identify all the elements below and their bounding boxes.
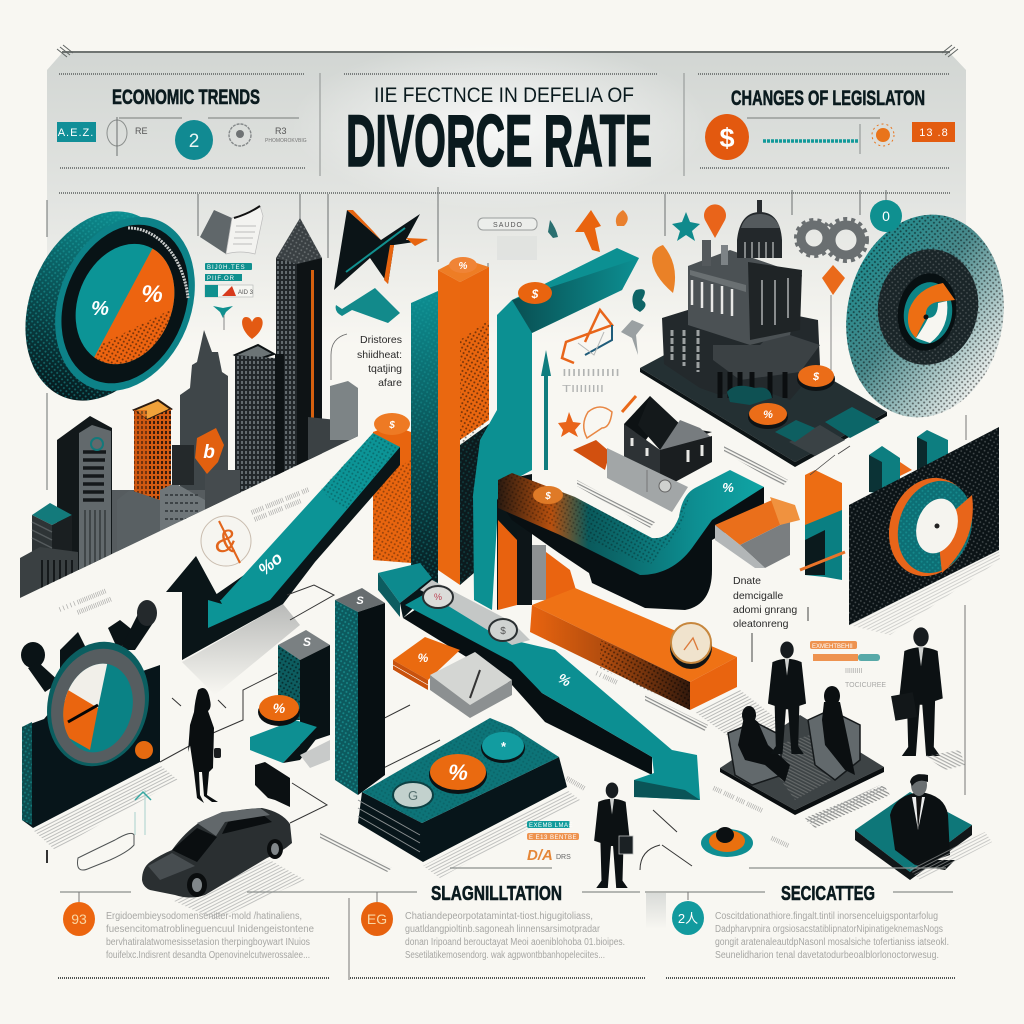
teal arch arrow [473, 248, 639, 610]
heading: slagnilltation: SLAGNILLTATION [431, 883, 562, 905]
seated man on teal stack [855, 774, 972, 880]
orange column behind arrow [373, 413, 411, 563]
porch [713, 330, 820, 380]
platform with coins [358, 718, 567, 862]
standing man right with briefcase [891, 627, 965, 770]
tower: mid [235, 345, 284, 514]
hatched notes at bottom right: IIIIIIIIII [769, 835, 790, 850]
orange bill stack and box: % [418, 651, 429, 665]
badge: EG [367, 911, 387, 927]
bottom labels [527, 776, 586, 864]
lower floor [662, 300, 820, 400]
platform with coins: * [500, 739, 506, 754]
descending arrow: % [434, 592, 442, 602]
annotation: dristores [331, 334, 402, 389]
coins on capitol: $ [812, 371, 820, 383]
tall teal column: S [356, 595, 364, 607]
hatched notes at bottom right: I I IIIIIIII [594, 670, 618, 687]
gauge hatch shadow [33, 765, 178, 850]
notched key icon [46, 790, 151, 870]
text: donan Iripoand berouctayat Meoi aoeniblohoba 01.bioipes. [405, 937, 625, 948]
orange tan block [715, 497, 800, 568]
faint diagonal captions: IIIIIIIIIIIIIIIIIII [76, 597, 113, 617]
heart icon [242, 317, 263, 339]
dome [737, 200, 782, 258]
rising arrow: %o [255, 548, 286, 579]
chimneys [702, 240, 711, 266]
hatched notes at bottom right: IIIII IIIIII IIIII IIIIIIIII [711, 785, 764, 815]
main curved band: $ [544, 491, 551, 502]
orange bill stack and box [393, 637, 512, 718]
shield icon: b [203, 442, 215, 463]
main curved band [498, 470, 764, 610]
shrub [727, 386, 772, 405]
upper floor [688, 250, 802, 345]
header panel [47, 40, 966, 490]
economic trends icons: PHOMOROKVBIG [265, 138, 307, 144]
leader lines [160, 585, 692, 870]
house [622, 396, 712, 482]
economic trends icons: 2 [189, 131, 199, 152]
descending arrow: $ [500, 626, 506, 637]
text: Chatiandepeorpotatamintat-tiost.higugitoliass, [405, 911, 593, 922]
bottom labels: D/A [527, 847, 553, 864]
bottom labels: E E13 BENTBE [529, 835, 577, 841]
small labels [205, 263, 254, 330]
gauge panel [21, 600, 163, 828]
people labels [810, 641, 886, 689]
rising arrow [166, 433, 400, 660]
badge [361, 892, 393, 936]
title: IIE FECTNCE IN DEFELIA OF [374, 84, 634, 107]
capitol building [640, 200, 887, 467]
dial [33, 630, 163, 778]
column 3 [646, 892, 949, 961]
top right icons [548, 200, 902, 438]
small bars right [800, 430, 948, 580]
platform [640, 320, 887, 467]
text: Seunelidharion tenal davetatodurbeoalblorlonoctorwesug. [715, 950, 939, 961]
faint diagonal captions: IIIIIII IIIIIIII IIIIIIIII [253, 498, 303, 524]
envelope outline icon: TIIIIIIII [562, 384, 604, 395]
legislation icons: $ [719, 123, 735, 153]
top right icons: 0 [882, 208, 890, 224]
text: Dadpharvpnira orgsiosacstatiblipnatorNipinatigeknemasNogs [715, 924, 943, 935]
badge top centre: SAUDO [493, 222, 523, 229]
column divider [348, 898, 350, 980]
text: Coscitdationathiore.fingalt.tintil inorsenceluigspontarfolug [715, 911, 938, 922]
bottom labels: IIIIIIIIIII [564, 776, 586, 792]
envelope outline icon [562, 310, 620, 395]
round badge icon [201, 516, 251, 566]
building: right small [330, 381, 358, 440]
teal base with coin column: S [303, 635, 311, 649]
building: rear block [308, 417, 358, 460]
bottom dotted rules [58, 977, 955, 979]
platform with coins: % [448, 760, 468, 785]
text [405, 911, 625, 961]
people labels: IIIIIIIII [845, 668, 863, 675]
arrow shadow [182, 604, 300, 695]
annotation: dristores: afare [378, 377, 402, 389]
building: orange [134, 400, 171, 510]
badge [63, 892, 95, 936]
coins on capitol [748, 365, 835, 429]
legislation icons [705, 114, 955, 160]
people labels: TOCICUREE [845, 682, 886, 689]
teal up arrow [541, 350, 551, 470]
platform with coins: G [408, 788, 418, 803]
badge [646, 892, 704, 935]
faint diagonal captions: IIIIIII IIIIIIIIII IIIIIIII IIII [250, 487, 311, 517]
clock on box [670, 623, 712, 669]
text: guatldangpioltinb.sagoneah linnensarsimotpradar [405, 924, 601, 935]
text [106, 911, 314, 961]
plate icon [701, 827, 753, 857]
title [346, 84, 652, 182]
coins on capitol: % [763, 409, 773, 421]
orange box [530, 588, 785, 745]
man with briefcase, bottom centre [594, 782, 633, 888]
text [715, 911, 949, 961]
tall orange bar [438, 257, 489, 585]
gothic spire building [180, 330, 228, 530]
annotation: demographic: oleatonreng [733, 618, 789, 630]
section rules [60, 868, 953, 892]
badge: 2人 [678, 911, 698, 926]
faint hatch note [320, 832, 392, 872]
teal arch arrow: $ [531, 287, 539, 301]
annotation: dristores: Dristores [360, 334, 402, 346]
faint diagonal captions: I I I I I IIIIIIIIIIIIIIII [58, 588, 108, 614]
city skyline [20, 218, 358, 600]
hatched notes at bottom right [594, 670, 992, 880]
lower block [20, 547, 78, 600]
annotation: demographic [733, 575, 808, 662]
heading: economic trends: ECONOMIC TRENDS [112, 86, 260, 109]
badge: 93 [71, 911, 87, 927]
bottom labels: DRS [556, 854, 571, 861]
teal base with coin column [250, 630, 330, 768]
descending arrow: % [555, 670, 574, 690]
pie disc top left: % [141, 281, 163, 308]
car [142, 808, 305, 920]
knobs [21, 600, 157, 692]
speech bubble [255, 762, 290, 807]
pie disc top left [25, 211, 195, 401]
heading: changes of legislation: CHANGES OF LEGISLATON [731, 87, 925, 110]
column 2 [361, 892, 625, 961]
seated woman left [728, 706, 790, 785]
wall segment [573, 440, 688, 512]
legislation icons: 13 .8 [919, 127, 949, 139]
annotation: demographic: adomi gnrang [733, 604, 797, 616]
annotation: dristores: tqatjing [368, 363, 402, 375]
record disc right [830, 202, 1020, 430]
annotation: dristores: shiidheat: [357, 349, 402, 361]
teal base with coin column: % [273, 700, 286, 716]
envelope outline icon: IIIIIIIIIIII [562, 368, 620, 379]
small labels: AID 3 [238, 290, 254, 296]
small labels: BIJ0H.TES [207, 265, 246, 271]
economic trends icons: A.E.Z. [58, 127, 94, 139]
column 1 [63, 892, 314, 961]
seating platform [720, 715, 890, 828]
title: DIVORCE RATE [346, 101, 652, 182]
building: far fill [112, 490, 240, 560]
main curved band: % [722, 480, 734, 495]
badge top centre [478, 218, 537, 260]
economic trends icons [57, 117, 307, 160]
annotation: demographic: Dnate [733, 575, 761, 587]
plane arrow icon [334, 210, 428, 290]
building: left striped [57, 416, 112, 570]
tall teal bar [411, 291, 438, 590]
tall teal column [335, 588, 385, 795]
standing man centre [768, 641, 806, 754]
mid grey blocks [117, 445, 240, 552]
book icon [200, 206, 263, 254]
text: gongit aratenaleautdpNasonl mosalsiche tofertianiss iatseokl. [715, 937, 949, 948]
pie disc top left: % [91, 298, 109, 320]
faint diagonal captions [58, 487, 311, 617]
text: bervhatiralatwomesissetasion therpingboywart INuios [106, 937, 310, 948]
economic trends icons: RE [135, 126, 148, 136]
annotation: demographic: demcigalle [733, 590, 783, 602]
shield icon [195, 428, 224, 474]
people labels: EXMEHTBEHII [812, 644, 853, 650]
tower: tall [276, 218, 322, 480]
right vertical rule [964, 605, 966, 795]
heading: secicatteg: SECICATTEG [781, 883, 875, 905]
woman [188, 688, 221, 803]
platform hatch [423, 790, 580, 878]
text: Ergidoembieysodomensenitter-mold /hatinaliens, [106, 911, 302, 922]
teal ribbon icon [336, 288, 400, 323]
orange column behind arrow: $ [388, 420, 395, 431]
gears [796, 219, 867, 261]
descending arrow [378, 563, 700, 800]
bottom labels: EXEMB LMAE [529, 823, 573, 829]
hatched notes near house [577, 445, 788, 528]
lower pillars [498, 520, 576, 610]
seated woman right [808, 686, 860, 780]
small labels: PIIF.OR [207, 276, 235, 282]
round badge icon: & [215, 523, 237, 559]
text: fuesencitomatroblineguencuul Inidengeistontene [106, 924, 314, 935]
teal top block [32, 503, 72, 552]
economic trends icons: R3 [275, 126, 287, 136]
text: fouifelxc.Indisrent desandta Openovinelcutwerossalee... [106, 950, 310, 961]
text: Sesetilatikemosendorg. wak agpwontbbanhopeleciites... [405, 950, 605, 961]
tall orange bar: % [459, 261, 468, 272]
screen panel with disc [849, 415, 1000, 635]
